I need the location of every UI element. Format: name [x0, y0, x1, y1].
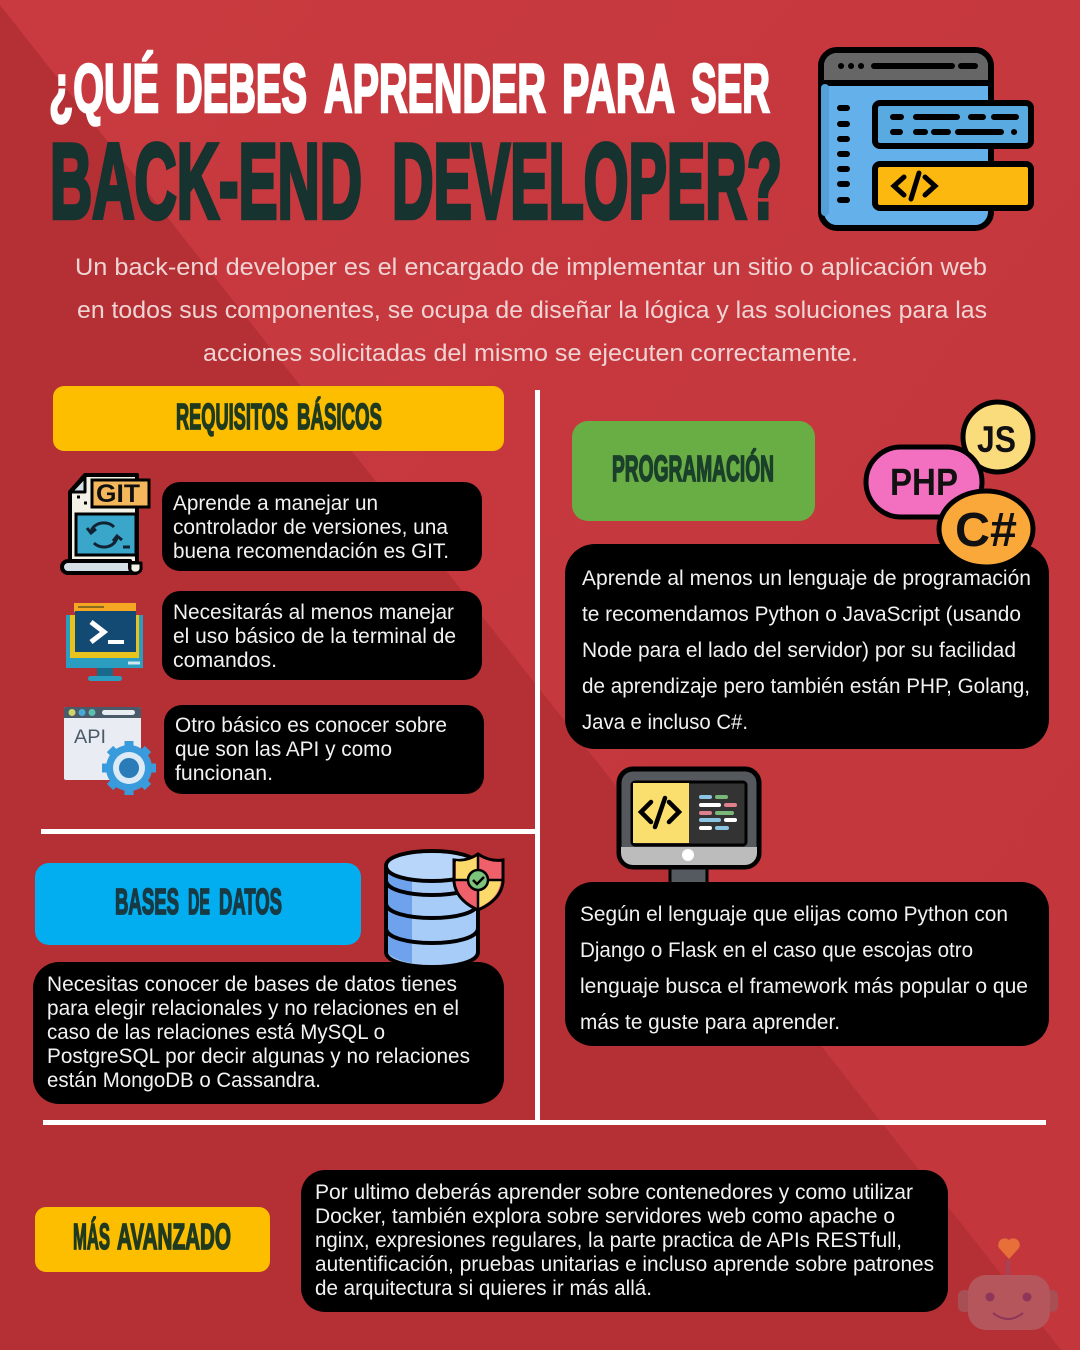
text block: terminal: comandos. — [173, 648, 277, 672]
text block: bases de datos: para elegir relacionales y no relaciones en el — [47, 996, 459, 1020]
icon: language bubbles: PHP — [890, 462, 958, 504]
text block: framework: más te guste para aprender. — [580, 1010, 840, 1034]
text block: lenguaje: Java e incluso C#. — [582, 710, 748, 734]
heading: más avanzado — [35, 1207, 270, 1272]
icon: code monitor — [619, 769, 759, 884]
heading: programación — [572, 421, 815, 521]
text block: bases de datos: PostgreSQL por decir algunas y no relaciones — [47, 1044, 470, 1068]
title: DEBES — [175, 50, 307, 127]
heading: bases de datos: BASES — [115, 881, 179, 922]
text block: api — [164, 705, 484, 794]
icon: api gear — [64, 707, 156, 795]
heading: más avanzado: MÁS — [73, 1216, 110, 1257]
heading: bases de datos — [35, 863, 361, 945]
icon: git file: GIT — [96, 480, 140, 508]
text block: más avanzado — [301, 1170, 948, 1312]
intro text — [75, 254, 987, 367]
icon: language bubbles: JS — [977, 419, 1016, 460]
panel: programación — [565, 402, 1049, 1046]
text block: framework: Según el lenguaje que elijas como Python con — [580, 902, 1008, 926]
text block: más avanzado: Docker, también explora sobre servidores web como apache o — [315, 1204, 895, 1228]
title: PARA — [562, 50, 675, 127]
icon: language bubbles — [866, 402, 1033, 567]
title: APRENDER — [324, 50, 546, 127]
icon: git file — [62, 475, 149, 573]
panel: requisitos básicos — [53, 386, 504, 795]
text block: git — [162, 482, 482, 571]
text block: framework: lenguaje busca el framework más popular o que — [580, 974, 1028, 998]
text block: git: Aprende a manejar un — [173, 491, 378, 515]
heading: requisitos básicos: BÁSICOS — [297, 396, 382, 437]
text block: framework — [565, 882, 1049, 1046]
intro text: en todos sus componentes, se ocupa de diseñar la lógica y las soluciones para las — [77, 297, 987, 324]
icon: code window — [821, 50, 1031, 228]
heading: requisitos básicos: REQUISITOS — [176, 396, 288, 437]
text block: bases de datos: caso de las relaciones está MySQL o — [47, 1020, 385, 1044]
text block: bases de datos: están MongoDB o Cassandra. — [47, 1068, 321, 1092]
text block: api: Otro básico es conocer sobre — [175, 713, 447, 737]
text block: bases de datos: Necesitas conocer de bases de datos tienes — [47, 972, 457, 996]
text block: terminal: Necesitarás al menos manejar — [173, 600, 454, 624]
heading: requisitos básicos — [53, 386, 504, 451]
icon: language bubbles: C# — [955, 504, 1017, 557]
heading: bases de datos: DE — [188, 881, 210, 922]
text block: más avanzado: Por ultimo deberás aprender sobre contenedores y como utilizar — [315, 1180, 913, 1204]
text block: más avanzado: de arquitectura si quieres ir más allá. — [315, 1276, 652, 1300]
text block: lenguaje: te recomendamos Python o JavaScript (usando — [582, 602, 1021, 626]
text block: api: que son las API y como — [175, 737, 392, 761]
text block: más avanzado: autentificación, pruebas unitarias e incluso aprende sobre patrones — [315, 1252, 934, 1276]
intro text: acciones solicitadas del mismo se ejecuten correctamente. — [203, 340, 858, 367]
icon: terminal monitor — [66, 603, 143, 681]
icon: database shield — [386, 851, 503, 967]
heading: bases de datos: DATOS — [219, 881, 282, 922]
heading: programación: PROGRAMACIÓN — [612, 447, 774, 489]
text block: terminal — [162, 591, 482, 680]
text block: git: controlador de versiones, una — [173, 515, 448, 539]
panel: más avanzado — [35, 1170, 948, 1312]
text block: api: funcionan. — [175, 761, 273, 785]
icon: robot watermark — [958, 1238, 1058, 1330]
text block: lenguaje: de aprendizaje pero también están PHP, Golang, — [582, 674, 1030, 698]
title: SER — [691, 50, 770, 127]
text block: lenguaje: Node para el lado del servidor) por su facilidad — [582, 638, 1016, 662]
title: BACK-END — [50, 121, 362, 241]
text block: lenguaje: Aprende al menos un lenguaje de programación — [582, 566, 1031, 590]
text block: framework: Django o Flask en el caso que escojas otro — [580, 938, 973, 962]
heading: más avanzado: AVANZADO — [117, 1216, 231, 1257]
panel: bases de datos — [33, 851, 504, 1104]
text block: terminal: el uso básico de la terminal de — [173, 624, 456, 648]
text block: lenguaje — [565, 544, 1049, 749]
text block: bases de datos — [33, 962, 504, 1104]
title — [49, 50, 782, 241]
text block: más avanzado: nginx, expresiones regulares, la parte practica de APIs RESTfull, — [315, 1228, 902, 1252]
icon: api gear: API — [74, 727, 106, 748]
divider lines — [41, 390, 1046, 1125]
text block: git: buena recomendación es GIT. — [173, 539, 449, 563]
intro text: Un back-end developer es el encargado de implementar un sitio o aplicación web — [75, 254, 987, 281]
title: ¿QUÉ — [49, 50, 159, 127]
